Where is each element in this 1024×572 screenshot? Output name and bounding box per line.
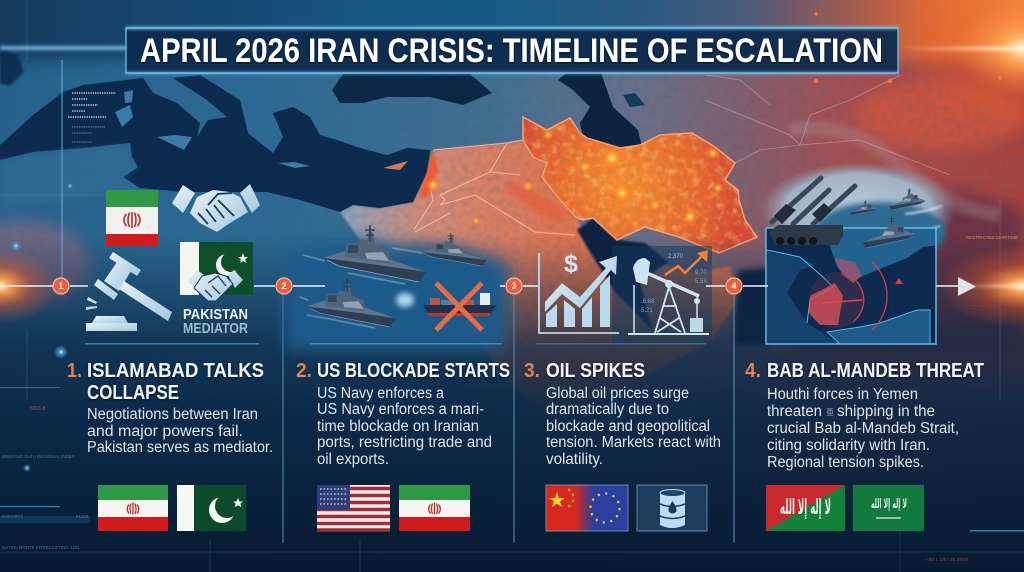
flag: Saudi Arabia: لا إله إلا الله: [871, 497, 907, 512]
body text 2: [317, 385, 492, 468]
Atlantic corner: [0, 48, 24, 86]
body text 1: Pakistan serves as mediator.: [87, 439, 273, 456]
arrowhead: [958, 277, 976, 296]
body text 3: blockade and geopolitical: [546, 418, 710, 435]
icon: oil barrel box: [637, 485, 707, 531]
flag: red and green split: [766, 485, 845, 531]
heading 1: 1.: [67, 359, 82, 382]
Aral Sea: [623, 93, 645, 107]
Black Sea: [332, 74, 492, 105]
HUD data readouts: · · · · · · · · ·: [966, 303, 990, 308]
flag: China and EU blend: [546, 485, 628, 531]
marker 2: 2: [281, 281, 287, 291]
strait tactical map: [766, 228, 940, 344]
upper colour band: [0, 0, 1024, 60]
lower dark fade: [0, 235, 1024, 572]
icon: Pakistan flag: [180, 242, 253, 295]
body text 3: Global oil prices surge: [546, 385, 689, 402]
marker 1: 1: [58, 281, 64, 291]
heading 1: ISLAMABAD TALKS: [87, 359, 264, 382]
vertical panel dividers: [62, 60, 734, 543]
icon: blocked cargo ship: [423, 283, 497, 330]
sea illustration: [285, 240, 510, 350]
body text 4: 亜: [826, 408, 834, 417]
Central Asia borders: [705, 75, 950, 175]
heading 1: [67, 359, 264, 404]
mediator label: MEDIATOR: [183, 321, 248, 337]
body text 1: Negotiations between Iran: [87, 406, 258, 423]
icon: rising market chart: [539, 250, 619, 333]
body text 4: Regional tension spikes.: [767, 454, 924, 471]
Africa highlight: [0, 145, 138, 210]
icon: warship small: [421, 233, 486, 266]
body text 2: US Navy enforces a mari-: [317, 401, 484, 418]
flare: right: [939, 244, 1024, 328]
light streak: top right: [898, 46, 1024, 50]
blue light streak behind title: [0, 46, 128, 50]
body text 4: threaten: [767, 403, 822, 420]
body text 4: [767, 386, 959, 471]
icon: rising market chart: $: [564, 250, 578, 278]
heading 1: COLLAPSE: [87, 381, 179, 404]
market readings: [641, 254, 707, 314]
body text 2: time blockade on Iranian: [317, 418, 479, 435]
icon: large handshake: [172, 184, 260, 232]
Cyprus: [383, 161, 408, 170]
HUD data readouts: DATES: ROUTE FORECASTING 4401: [2, 545, 80, 550]
icon: orange price arrow: [665, 254, 704, 275]
icon: missile launcher: [769, 178, 855, 245]
HUD data readouts: 5001.8: [30, 406, 46, 412]
icon: small handshake: [188, 270, 243, 301]
body text 3: [546, 385, 721, 468]
flag: Iran: [399, 485, 470, 531]
body text 2: US Navy enforces a: [317, 385, 444, 402]
HUD data readouts: 81183: [76, 514, 89, 519]
market readings: 9.70: [695, 270, 707, 276]
body text 2: oil exports.: [317, 451, 389, 468]
fog illustration background: [760, 162, 956, 258]
HUD data readouts: [0, 183, 1024, 562]
HUD data readouts: RESTRICTED MARITIME: [966, 235, 1018, 240]
terrain texture: [0, 60, 1024, 360]
mediator label: [183, 306, 248, 337]
flag: Iran: [98, 485, 168, 531]
icon: gavel: [86, 252, 172, 331]
marker 4: [726, 278, 742, 294]
Tibet plateau tint: [855, 80, 1024, 150]
body text 2: ports, restricting trade and: [317, 434, 492, 451]
icon: oil pumpjack: [628, 258, 709, 334]
HUD data readouts: EXPORTS: [2, 514, 23, 519]
market readings: 5.58: [695, 279, 707, 285]
marker 3: 3: [511, 281, 517, 291]
Arabian peninsula: [340, 140, 738, 420]
HUD dotted lists upper left: [68, 93, 116, 142]
icon: warship large: [323, 225, 426, 282]
HUD data readouts: BRIEFING DATA REGIONAL INDEX: [2, 454, 75, 459]
flare tint lower left: [0, 220, 90, 310]
body text 1: and major powers fail.: [87, 423, 243, 440]
panel 3: oil spikes: [524, 246, 721, 531]
Persian Gulf: [577, 218, 668, 330]
heat-lit Iran and neighbours on map: [414, 110, 760, 260]
body text 3: tension. Markets react with: [546, 434, 721, 451]
Mediterranean islands: [115, 90, 310, 168]
heading 4: BAB AL-MANDEB THREAT: [767, 359, 984, 382]
flag: red and green split: لا إله إلا الله: [780, 495, 831, 519]
icon: warship lower: [306, 278, 396, 327]
title banner: APRIL 2026 IRAN CRISIS: TIMELINE OF ESCALATION: [140, 32, 883, 70]
light streak: right: [960, 284, 1024, 288]
right lower dark tint: [800, 190, 1024, 350]
market readings: .6.68: [641, 299, 655, 305]
heading 4: 4.: [745, 359, 761, 382]
heading 3: OIL SPIKES: [546, 359, 645, 382]
Himalaya ridge: [790, 128, 1000, 215]
timeline: [0, 277, 976, 296]
marker 2: [276, 278, 292, 294]
Mediterranean sea: [0, 75, 430, 212]
flag: Saudi Arabia: [853, 485, 924, 531]
flare: top right: [899, 0, 1024, 138]
body text 3: volatility.: [546, 451, 603, 468]
sea behind patrol boats: [814, 202, 946, 262]
market readings: 2.370: [668, 254, 684, 260]
heading 2: US BLOCKADE STARTS: [317, 359, 510, 382]
panel 4: Bab al-Mandeb: [745, 162, 984, 531]
flag: Pakistan: [177, 485, 246, 531]
far-field hotspots: [814, 12, 1002, 83]
Caspian Sea: [558, 70, 642, 148]
panel 1: Islamabad talks: [67, 184, 273, 531]
body text 3: dramatically due to: [546, 401, 669, 418]
body text 4: crucial Bab al-Mandeb Strait,: [767, 420, 959, 437]
boat wakes: [868, 206, 942, 242]
arrowhead: [697, 250, 708, 262]
body text 1: [87, 406, 273, 456]
market readings: 5.21: [641, 308, 653, 314]
body text 4: Houthi forces in Yemen: [767, 386, 918, 403]
flare: left: [0, 248, 58, 324]
ship wakes: [300, 248, 423, 328]
body text 4: citing solidarity with Iran.: [767, 437, 930, 454]
mediator label: PAKISTAN: [183, 306, 248, 323]
heading 2: 2.: [296, 359, 312, 382]
panel 2: US blockade: [285, 225, 510, 531]
heading 3: 3.: [524, 359, 540, 382]
icon: Iran flag: [106, 190, 158, 246]
marker 3: [506, 278, 522, 294]
Arabian Sea: [734, 268, 770, 345]
icon: patrol boats: [850, 188, 926, 248]
body text 4: shipping in the: [837, 403, 935, 420]
HUD data readouts: +.03 1.120 / 2E.05/22: [925, 557, 969, 562]
marker 4: 4: [731, 281, 737, 291]
marker 1: [53, 278, 69, 294]
flag: USA: [317, 485, 390, 531]
